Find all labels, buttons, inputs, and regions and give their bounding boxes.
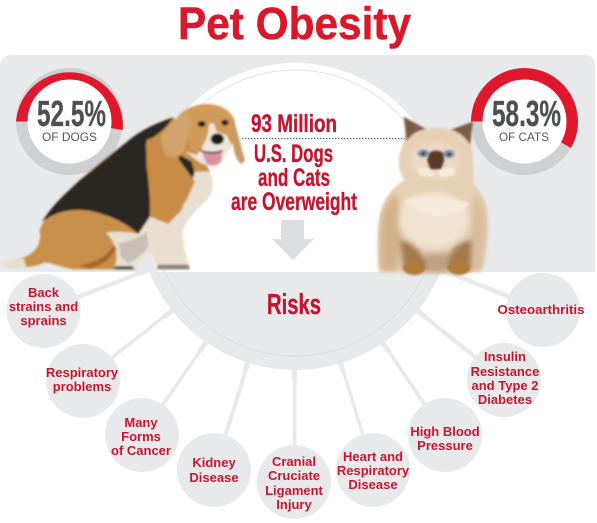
risk bubble: back strains and sprains: strains and	[9, 299, 78, 314]
risk bubble: insulin resistance and type 2 diabetes: Insulin	[484, 349, 526, 364]
risk bubble: respiratory problems: Respiratory	[46, 365, 119, 380]
risk bubble: many forms of cancer	[105, 398, 179, 472]
risk bubble: respiratory problems	[46, 344, 120, 418]
risk bubble: heart and respiratory disease: Disease	[348, 477, 398, 492]
risk bubble: insulin resistance and type 2 diabetes: Resistance	[471, 364, 539, 379]
risk bubble: kidney disease: Kidney	[192, 455, 236, 470]
heading: 93 million overweight: 93 Million	[251, 110, 337, 138]
risk bubble: insulin resistance and type 2 diabetes: Diabetes	[478, 392, 532, 407]
risk bubble: heart and respiratory disease: Heart and	[343, 449, 403, 464]
risk bubble: heart and respiratory disease	[336, 433, 410, 507]
risk bubble: kidney disease	[177, 433, 251, 507]
risk bubble: respiratory problems: problems	[53, 379, 111, 394]
risk bubble: insulin resistance and type 2 diabetes: and Type 2	[472, 378, 538, 393]
arrow: down	[272, 220, 314, 260]
donut: 58.3% of cats: OF CATS	[499, 130, 549, 144]
risk bubble: back strains and sprains: sprains	[20, 313, 67, 328]
risk bubble: cranial cruciate ligament injury	[257, 445, 331, 519]
risk bubble: heart and respiratory disease: Respiratory	[337, 463, 410, 478]
risk bubble: high blood pressure: High Blood	[410, 424, 480, 439]
risk bubble: cranial cruciate ligament injury: Ligament	[265, 483, 324, 498]
donut: 52.5% of dogs	[16, 68, 123, 175]
risk bubble: many forms of cancer: Forms	[121, 429, 161, 444]
risk bubble: insulin resistance and type 2 diabetes	[467, 343, 541, 417]
donut: 58.3% of cats	[471, 68, 578, 175]
risk bubble: high blood pressure	[408, 398, 482, 472]
dotted connector line	[242, 138, 405, 140]
risk bubble: osteoarthritis	[498, 273, 584, 347]
donut: 52.5% of dogs: 52.5%	[37, 93, 106, 134]
risk bubble: cranial cruciate ligament injury: Cranial	[272, 454, 316, 469]
illustration: overweight dog	[2, 104, 245, 269]
risk bubble: osteoarthritis: Osteoarthritis	[498, 302, 584, 317]
risk bubble: back strains and sprains: Back	[28, 285, 60, 300]
risk bubble: cranial cruciate ligament injury: Cruciate	[268, 468, 320, 483]
panel: risks diagram background	[77, 272, 510, 445]
risk bubble: many forms of cancer: Many	[124, 415, 158, 430]
heading: 93 million overweight: and Cats	[258, 164, 330, 192]
heading: 93 million overweight: are Overweight	[231, 188, 357, 216]
risk bubble: back strains and sprains	[6, 274, 80, 348]
risk bubble: high blood pressure: Pressure	[417, 438, 473, 453]
risk bubble: kidney disease: Disease	[189, 470, 239, 485]
heading: risks: Risks	[267, 289, 321, 321]
risk bubble: cranial cruciate ligament injury: Injury	[276, 497, 312, 512]
illustration: overweight cat	[378, 117, 488, 275]
donut: 58.3% of cats: 58.3%	[492, 93, 561, 134]
panel: overweight statistics	[0, 55, 595, 272]
risk bubble: many forms of cancer: of Cancer	[111, 443, 171, 458]
heading: 93 million overweight: U.S. Dogs	[254, 140, 333, 168]
heading: 93 million overweight	[231, 110, 357, 216]
donut: 52.5% of dogs: OF DOGS	[42, 130, 97, 144]
